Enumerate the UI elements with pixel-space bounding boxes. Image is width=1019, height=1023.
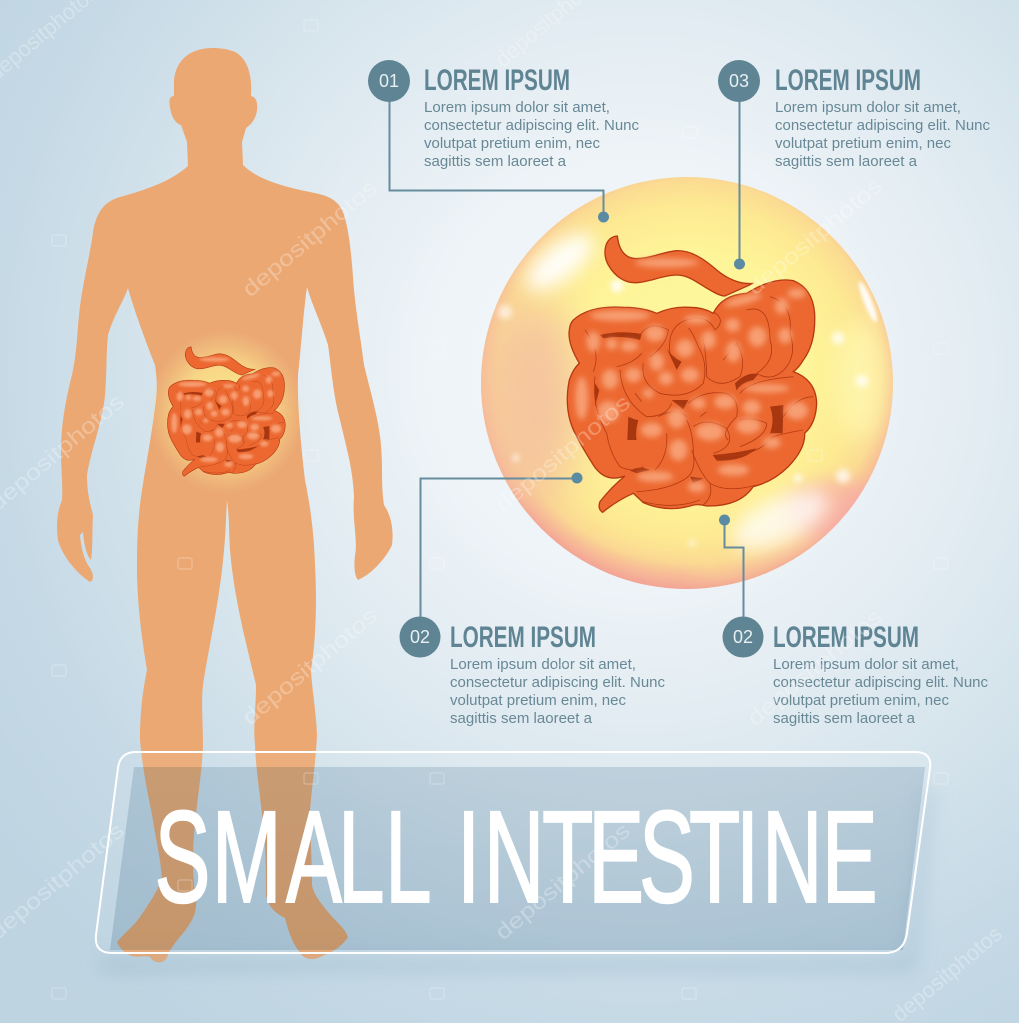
callout 02 right: consectetur adipiscing elit. Nunc [773,675,988,691]
callout 03: LOREM IPSUM [775,64,921,97]
watermarks: depositphotos [237,603,382,730]
glass panel [96,752,930,953]
callout 02 right [722,616,988,727]
leader 02 right [719,514,744,620]
watermarks: depositphotos [742,604,887,731]
callout 01: Lorem ipsum dolor sit amet, [424,100,610,116]
magnified bubble [481,177,893,589]
callout 02 left: volutpat pretium enim, nec [450,693,626,709]
callout 01: consectetur adipiscing elit. Nunc [424,118,639,134]
watermarks: depositphotos [237,175,382,302]
callout 03 [718,60,990,170]
callout 03: Lorem ipsum dolor sit amet, [775,100,961,116]
glass panel shadow [100,790,935,972]
callout 02 left: Lorem ipsum dolor sit amet, [450,657,636,673]
callout 02 left: 02 [410,627,430,647]
callout 02 right: Lorem ipsum dolor sit amet, [773,657,959,673]
callout 02 right: sagittis sem laoreet a [773,711,916,727]
watermarks: depositphotos [490,390,635,517]
leader 03 [734,100,745,270]
callout 01 [368,60,639,170]
magnified small intestine [567,236,817,512]
callout 03: consectetur adipiscing elit. Nunc [775,118,990,134]
title: SMALL INTESTINE [155,784,878,931]
callout 02 left: sagittis sem laoreet a [450,711,593,727]
callout 01: LOREM IPSUM [424,64,570,97]
callout 03: 03 [729,71,749,91]
watermarks: depositphotos [490,818,635,945]
human body silhouette [57,48,393,962]
bubble sparkles [498,280,868,546]
callout 01: sagittis sem laoreet a [424,154,567,170]
callout 02 left: consectetur adipiscing elit. Nunc [450,675,665,691]
callout 03: volutpat pretium enim, nec [775,136,951,152]
callout 02 left: LOREM IPSUM [450,621,596,654]
leader 01 [390,100,609,222]
callout 02 right: 02 [733,627,753,647]
small intestine on body [167,347,285,476]
callout 01: volutpat pretium enim, nec [424,136,600,152]
callout 02 left [400,616,665,727]
watermarks: depositphotos [742,173,887,300]
leader 02 left [420,472,582,620]
callout 03: sagittis sem laoreet a [775,154,918,170]
callout 02 right: volutpat pretium enim, nec [773,693,949,709]
intestine glow [148,330,304,494]
callout 02 right: LOREM IPSUM [773,621,919,654]
callout 01: 01 [379,71,399,91]
